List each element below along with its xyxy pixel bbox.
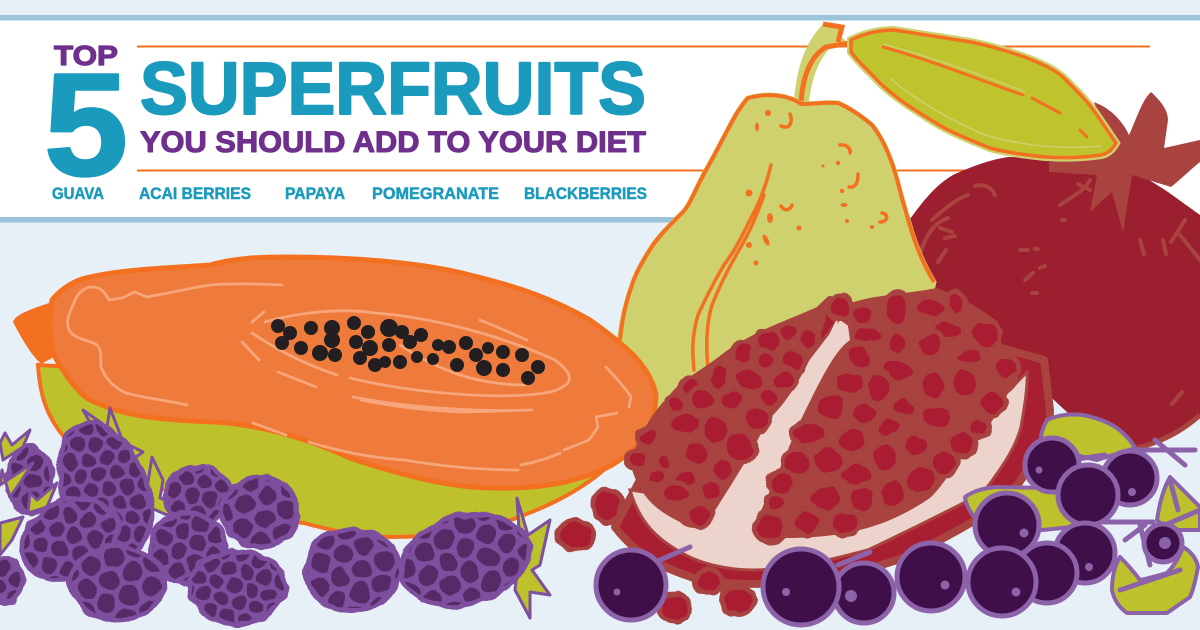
papaya flesh [50,257,656,488]
berry left [9,484,131,596]
rind [615,300,1050,584]
berry [165,467,231,523]
fruit list: ACAI BERRIES [139,184,251,203]
pear halo [620,95,934,420]
acai leaves [965,415,1200,613]
berry center [70,546,164,620]
berry tall [42,410,168,570]
heading: top: TOP [54,40,118,71]
berry cluster far left [0,446,52,602]
fruit list: PAPAYA [285,184,345,203]
pith strip between segments [705,316,838,535]
fruit list: BLACKBERRIES [524,184,647,203]
berry middle [306,529,400,611]
berry group right [150,467,298,623]
subheading: YOU SHOULD ADD TO YOUR DIET [140,126,646,159]
whole pomegranate [908,92,1200,452]
rind lines [693,165,771,370]
pomegranate rim [1112,415,1200,451]
pith [630,318,1027,570]
acai berry set [596,438,1182,625]
small left leaves [0,430,57,555]
rind line 2 [707,195,764,372]
papaya seeds [271,316,545,385]
acai highlights [614,466,1171,602]
papaya highlights [68,284,631,470]
berries bottom [306,501,539,619]
loose arils [560,491,752,620]
papaya green skin [38,365,612,537]
fruit list: GUAVA [52,184,104,203]
heading: superfruits: SUPERFRUITS [140,47,646,130]
cut pomegranate [560,288,1050,620]
guava pear [620,24,1116,420]
papaya [13,257,656,537]
stem [794,24,849,104]
spots [746,110,874,266]
fruit list: POMEGRANATE [372,184,499,203]
berry right [391,501,539,619]
berry [222,477,298,547]
pear outline [620,95,934,340]
arils [631,294,1016,539]
aril segment: left [630,302,828,528]
papaya tip [13,302,56,364]
fruit list [52,184,647,203]
blackberries [0,408,550,623]
acai berries [596,415,1200,625]
berry [8,446,52,514]
berry group left [9,410,168,620]
stem outline [801,24,850,105]
pomegranate texture [920,180,1200,404]
leaf [851,30,1116,158]
berry [0,558,22,602]
berry [189,551,285,623]
acai stems [660,440,1200,590]
crown [1049,92,1200,232]
aril segment: right [755,288,1018,538]
title banner [0,15,1200,222]
heading: 5: 5 [44,43,128,206]
berry [150,513,226,583]
spot hooks [781,114,887,222]
blackberry leaves [83,408,550,618]
